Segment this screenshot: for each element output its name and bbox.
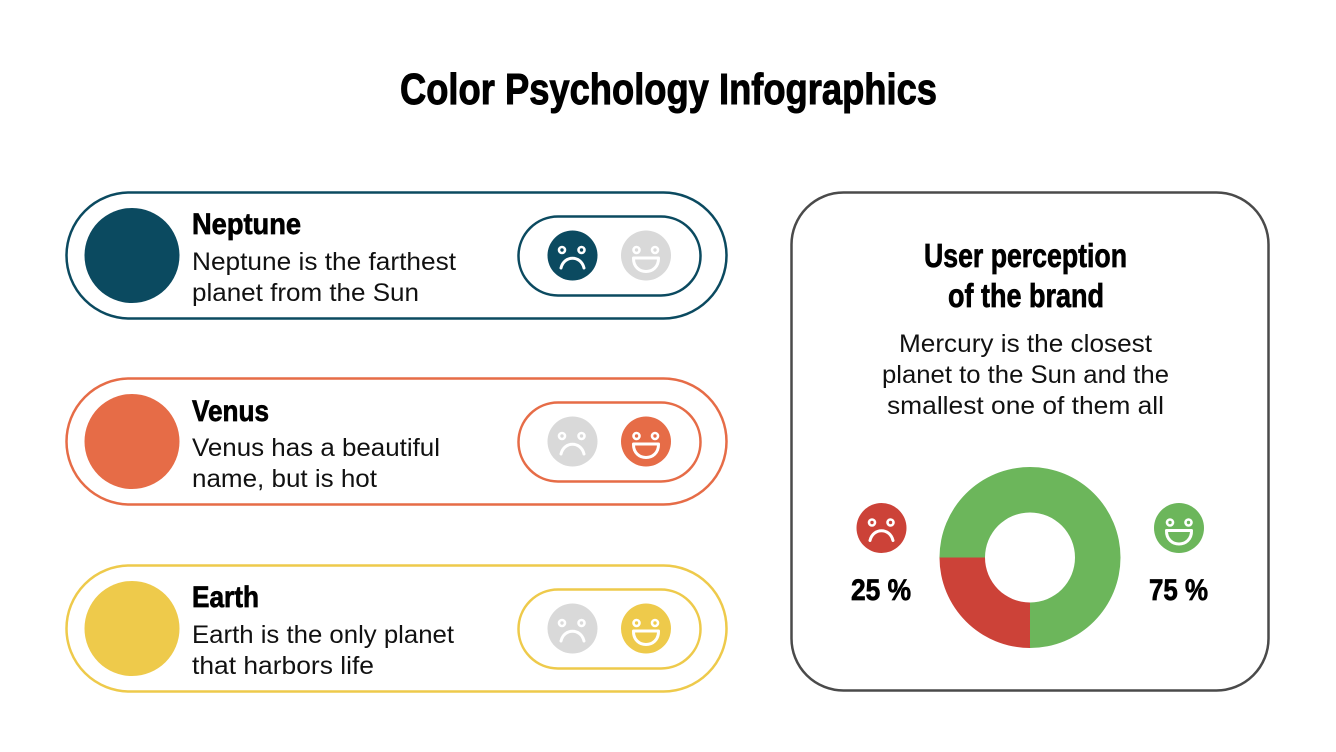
heading: Earth	[192, 581, 259, 614]
face pill	[518, 590, 700, 668]
description: Earth is the only planet	[192, 621, 454, 649]
donut chart	[940, 467, 1120, 648]
icon: positive face	[1154, 503, 1204, 553]
panel: Neptune	[66, 192, 726, 318]
negative percentage: 25 %	[851, 574, 911, 607]
panel: Earth	[66, 566, 726, 692]
panel outline	[792, 192, 1268, 690]
description: name, but is hot	[192, 465, 377, 493]
face pill	[518, 402, 700, 482]
panel description: planet to the Sun and the	[882, 361, 1169, 389]
panel description: smallest one of them all	[887, 392, 1164, 420]
icon: happy face	[621, 416, 671, 466]
panel: user perception	[792, 192, 1268, 690]
icon: sad face	[548, 416, 598, 466]
color swatch	[84, 208, 180, 303]
icon: negative face	[856, 503, 906, 553]
icon: happy face	[621, 604, 671, 654]
color swatch	[84, 581, 180, 676]
description: Neptune is the farthest	[192, 248, 456, 276]
face pill	[518, 216, 700, 296]
icon: happy face	[621, 230, 671, 280]
positive percentage: 75 %	[1149, 574, 1208, 607]
description: that harbors life	[192, 652, 374, 680]
icon: sad face	[548, 230, 598, 280]
heading: Neptune	[192, 208, 301, 241]
panel: Venus	[66, 378, 726, 504]
description: planet from the Sun	[192, 279, 419, 307]
color swatch	[84, 394, 180, 489]
panel heading: of the brand	[948, 277, 1104, 314]
icon: sad face	[548, 604, 598, 654]
panel description: Mercury is the closest	[899, 330, 1152, 358]
pill outline	[66, 192, 726, 318]
heading: Venus	[192, 395, 269, 428]
title: Color Psychology Infographics	[400, 65, 937, 114]
pill outline	[66, 378, 726, 504]
description: Venus has a beautiful	[192, 434, 440, 462]
pill outline	[66, 566, 726, 692]
panel heading: User perception	[924, 237, 1127, 274]
